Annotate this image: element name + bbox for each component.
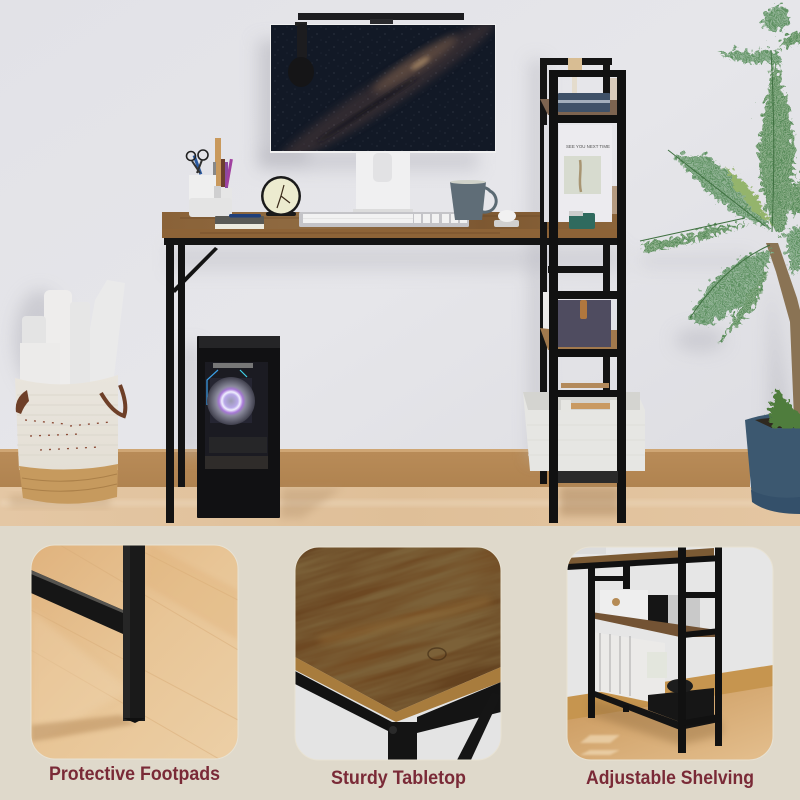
monitor with galaxy xyxy=(270,24,496,153)
monitor stand xyxy=(353,153,413,214)
top shelf with books xyxy=(540,58,618,115)
desk tabletop xyxy=(162,212,626,245)
computer tower xyxy=(197,336,280,518)
middle storage box xyxy=(540,292,618,350)
shelving unit front frame xyxy=(540,70,626,523)
keyboard xyxy=(299,212,469,227)
light bar xyxy=(298,13,464,25)
green tin xyxy=(569,211,595,229)
desk clock xyxy=(261,176,301,216)
coffee mug xyxy=(450,180,496,220)
fabric storage bin xyxy=(523,383,645,471)
headphones xyxy=(288,22,314,87)
caption: protective footpads: Protective Footpads xyxy=(49,764,220,785)
caption: adjustable shelving: Adjustable Shelving xyxy=(586,768,754,789)
potted fern plant xyxy=(637,1,800,514)
soft wall shadows xyxy=(14,40,790,460)
pencil cup with stationery xyxy=(186,138,233,217)
shelving unit back frame xyxy=(540,58,612,484)
room photo background xyxy=(0,0,800,527)
magazine poster on shelf xyxy=(544,125,618,222)
panel: sturdy tabletop xyxy=(294,546,502,760)
small white mouse xyxy=(494,210,519,227)
panel: protective footpads xyxy=(31,545,238,770)
beige lower section xyxy=(0,526,800,800)
notebook and pen xyxy=(215,214,264,229)
caption: sturdy tabletop: Sturdy Tabletop xyxy=(331,768,466,789)
woven basket with paper rolls xyxy=(15,280,125,504)
magazine poster on shelf: SEE YOU NEXT TIME xyxy=(566,144,610,149)
desk frame left legs xyxy=(166,245,218,523)
panel: adjustable shelving xyxy=(567,547,773,760)
